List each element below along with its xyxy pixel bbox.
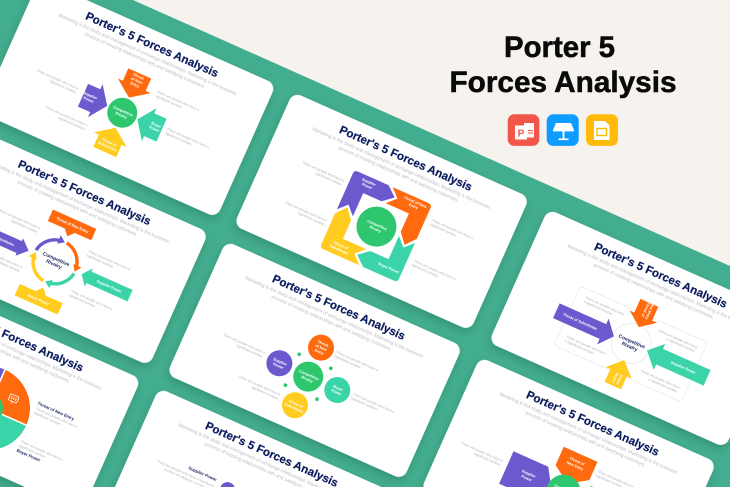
side notes: There are people who have a [222,333,266,355]
panel: slide top center, square loop [234,92,530,331]
five forces arrows diagram: Rivalry [115,111,128,120]
side notes: significant number. [49,79,77,95]
side notes: There are people who have [566,335,606,356]
side notes [458,414,640,487]
supplier power item: Supplier Power [188,465,218,482]
side notes: There are people who have a [20,439,63,462]
side notes: There are people who have a [238,374,281,397]
pentagons diagram: Supplier [521,469,537,479]
side notes [16,401,81,471]
slide subtitle: Marketing is the study and management of exchange relationships. Marketing is the business [498,391,678,476]
side notes [0,208,131,315]
five forces arrows diagram: Substitutes [97,141,117,152]
panel: slide middle center, circles [167,241,463,480]
side notes: There are people who have [658,329,698,350]
square loop diagram: Rivalry [369,225,383,234]
side notes [282,161,474,285]
side notes: significant number. [236,343,264,359]
side notes: There are people who have [584,295,625,316]
side notes: Buyer Power [16,448,42,463]
five forces arrows diagram: Supplier [83,91,98,101]
crossing arrows diagram: Threat of Substitutes [562,312,598,331]
crossing arrows diagram: Supplier Power [670,360,697,375]
side notes: There are people who have a [431,218,474,240]
panel: slide top right, crossing arrows [489,209,730,448]
crossing arrows diagram: Competitive [617,333,646,351]
side notes: significant number. [411,263,440,279]
side notes: significant number. [473,452,502,467]
side notes: significant number. [429,222,458,238]
crossing arrows diagram [538,268,726,419]
side notes: Threat of New Entry [37,401,76,422]
side notes: significant number. [58,116,86,131]
slide subtitle: process of creating relationships with and satisfying customers. [592,262,715,321]
slide subtitle: Marketing is the study and management of exchange relationships. Marketing is the business [311,126,491,211]
circles diagram: Entry [314,348,325,356]
cycle diagram: Competitive [42,251,71,268]
icon: Keynote [547,114,579,146]
five forces arrows diagram [65,56,179,169]
slide subtitle: process of creating relationships with and satisfying customers. [337,145,460,204]
heading: Porter 5 Forces Analysis: Forces Analysis [450,66,676,99]
heading: Porter 5 Forces Analysis [450,31,676,99]
side notes: a significant number. [583,300,614,316]
side notes: significant number. [68,293,97,309]
supplier power item [154,452,237,487]
side notes: There are people who have a [352,392,395,414]
side notes: There are people who have a [45,105,88,127]
circles diagram: Substitutes [284,402,304,414]
side notes [564,295,699,394]
slide subtitle: process of creating relationships with and satisfying customers. [270,294,393,353]
side notes: significant number. [334,354,362,370]
pentagons diagram: Power [521,474,533,483]
side notes: significant number. [297,211,326,227]
slide subtitle: Marketing is the study and management of exchange relationships. Marketing is the business [244,275,424,360]
slide title: Porter's 5 Forces Analysis [83,11,220,80]
pentagons diagram: Threat of [569,456,586,467]
panel: slide top left, arrows to circle [0,0,276,218]
cycle diagram: Supplier Power [96,279,123,294]
icon: PowerPoint: P [518,128,525,140]
icon: Google Slides [586,114,618,146]
pentagons diagram [499,429,636,487]
five forces arrows diagram: Threat of [101,137,118,148]
five forces arrows diagram: Power [83,96,95,104]
side notes: There are people who have a [88,249,131,272]
square loop diagram: Threat of New [403,195,427,209]
side notes: There are people who have a [157,90,200,112]
circles diagram: Threat of [288,399,304,409]
cycle diagram [0,184,149,338]
panel: slide bottom left, pie [0,274,141,487]
square loop diagram [320,170,432,282]
side notes: a significant number. [665,337,696,354]
circles diagram: Power [330,388,343,397]
square loop diagram: Competitive [367,219,388,231]
side notes: There are people who have a [413,259,456,281]
circles diagram [249,318,368,436]
side notes: significant number. [155,94,183,110]
pentagons diagram: New Entry [566,461,585,472]
side notes: There are people who have a [166,127,210,149]
side notes: There are people who have a [460,441,503,463]
panel: slide bottom right, pentagons [421,357,717,487]
slide subtitle: process of creating relationships with and satisfying customers. [84,32,206,90]
side notes: There are people who have [640,369,680,390]
circles diagram: Buyer [332,384,344,393]
slide title: Porter's 5 Forces Analysis [592,241,729,311]
side notes: There are people who have a [70,289,113,311]
square loop diagram: Supplier [361,177,377,187]
five forces arrows diagram: Buyer [151,121,162,129]
circles diagram: Power [272,362,285,370]
square loop diagram: Buyer Power [378,262,400,275]
slide subtitle: process of creating relationships with and satisfying customers. [16,180,138,238]
side notes: significant number. [164,131,193,147]
side notes: There are people who have a [284,200,327,223]
circles diagram: Rivalry [301,375,314,384]
side notes: a significant number. [564,339,595,356]
square loop diagram: Power [361,182,373,191]
cycle diagram: Threat of New Entry [55,216,90,235]
five forces arrows diagram: of New [130,76,143,85]
five forces arrows diagram: Power [148,125,161,133]
side notes: significant number. [33,411,62,426]
slide title: Porter's 5 Forces Analysis [524,389,661,459]
slide title: Porter's 5 Forces Analysis [270,273,407,343]
panel: slide bottom center [100,388,396,487]
square loop diagram: Threat of [333,241,349,251]
five forces arrows diagram: Entry [130,81,141,89]
slide title: Porter's 5 Forces Analysis [16,159,152,228]
crossing arrows diagram: New Entry [644,302,655,321]
crossing arrows diagram: Rivalry [621,341,638,353]
side notes: a significant number. [648,377,679,394]
icon: PowerPoint [508,114,539,146]
side notes: significant number. [86,253,114,269]
crossing arrows diagram: Threat of [640,301,651,318]
heading: Porter 5 Forces Analysis: Porter 5 [504,31,615,64]
cycle diagram: Buyer Power [27,294,50,307]
side notes: significant number. [251,385,279,401]
circles diagram: Supplier [272,357,288,367]
square loop diagram: Entry [408,203,419,210]
side notes: significant number. [10,219,39,234]
side notes [208,305,408,446]
side notes: significant number. [18,444,46,459]
crossing arrows diagram: Buyer [611,372,619,384]
side notes [22,41,222,180]
slide subtitle: Marketing is the study and management of exchange relationships. Marketing is the business [58,13,238,97]
slide title: Porter's 5 Forces Analysis [337,124,474,194]
circles diagram: of New [315,344,327,352]
circles diagram: Threat [317,340,329,348]
panel: slide middle left, cycle [0,127,209,366]
side notes: significant number. [350,396,379,412]
five forces arrows diagram: Competitive [112,105,133,117]
side notes: There are people who have a [302,161,345,183]
square loop diagram: Substitutes [329,244,349,256]
crossing arrows diagram: Power [615,374,623,386]
circles diagram: Competitive [298,369,319,381]
side notes: significant number. [315,171,343,187]
slide subtitle: process of creating relationships with and satisfying customers. [524,410,647,469]
five forces arrows diagram: Threat [132,73,145,81]
cycle diagram: Rivalry [45,259,63,271]
pie diagram [0,353,43,464]
side notes: There are people who have a [36,68,79,91]
side notes: There are people who have a [336,350,379,372]
side notes: There are people who have a [35,407,78,429]
